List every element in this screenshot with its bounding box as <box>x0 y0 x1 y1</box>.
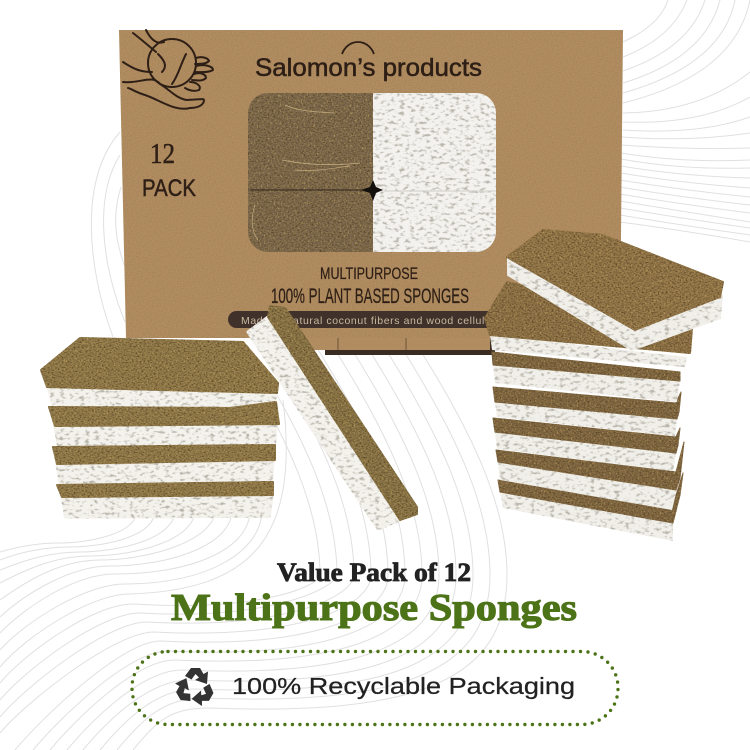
box bottom strip <box>300 335 495 355</box>
icon: hands holding globe <box>123 30 213 109</box>
dark pill with material text: Made of natural coconut fibers and wood cellulose <box>241 315 503 327</box>
right sponge stack <box>485 230 723 541</box>
white layers <box>47 385 277 518</box>
12 pack label: PACK <box>142 175 196 202</box>
icon: recycling <box>172 668 216 708</box>
leaning sponge <box>248 306 417 529</box>
brown layers <box>41 338 279 497</box>
packaging text: 100% Recyclable Packaging <box>232 673 575 699</box>
brand name with arc: Salomon’s products <box>255 54 482 82</box>
sponge 5 <box>493 418 680 471</box>
dotted pill outline <box>132 652 618 724</box>
box face <box>119 30 623 338</box>
box window with sponges <box>248 93 496 252</box>
left sponge stack <box>41 338 279 518</box>
sponge 4 <box>493 387 681 436</box>
multipurpose text: 100% PLANT BASED SPONGES <box>271 285 469 308</box>
product box <box>119 30 623 355</box>
brand name with arc <box>255 42 482 82</box>
sponge 6 <box>496 442 684 510</box>
heading: multipurpose sponges: Multipurpose Sponges <box>171 587 577 629</box>
heading: value pack: Value Pack of 12 <box>277 558 471 587</box>
multipurpose text: MULTIPURPOSE <box>320 264 418 283</box>
sponge 1 top <box>507 230 723 350</box>
sponge 3 <box>492 352 680 402</box>
dark pill with material text <box>228 311 518 328</box>
12 pack label <box>142 139 196 202</box>
sponge 7 bottom <box>498 473 683 541</box>
sponge 2 <box>485 282 692 367</box>
callout: recyclable packaging <box>132 652 618 724</box>
12 pack label: 12 <box>150 139 175 170</box>
multipurpose text <box>271 264 469 308</box>
